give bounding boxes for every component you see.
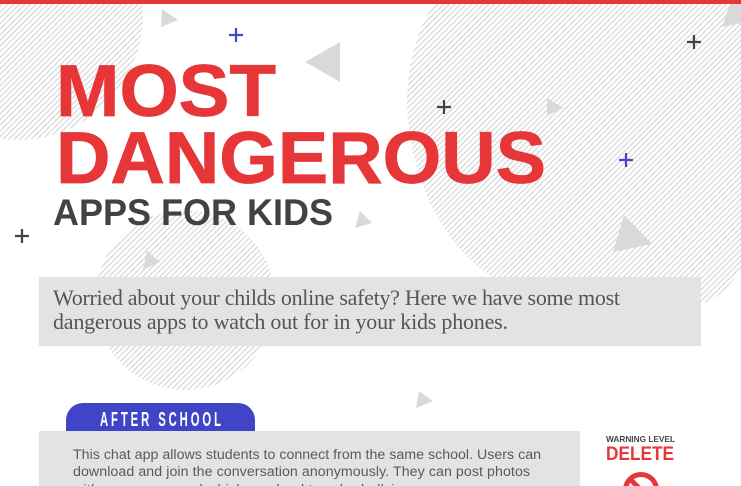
- hatched blob: right: [407, 0, 741, 311]
- description text: download and join the conversation anonymously. They can post photos: [73, 464, 530, 480]
- title: [56, 51, 546, 199]
- tab label: AFTER SCHOOL: [100, 407, 221, 431]
- intro text: dangerous apps to watch out for in your kids phones.: [53, 309, 508, 334]
- warning value: DELETE: [606, 443, 674, 465]
- icon: prohibited sign: [626, 474, 656, 486]
- warning level: WARNING LEVEL: [606, 435, 675, 444]
- intro panel: [39, 277, 701, 346]
- description text: This chat app allows students to connect from the same school. Users can: [73, 447, 541, 463]
- subtitle: APPS FOR KIDS: [53, 192, 333, 233]
- warning level: [606, 435, 675, 465]
- hatched circle: lower left: [95, 210, 275, 390]
- intro text: Worried about your childs online safety? Here we have some most: [53, 285, 620, 310]
- app description panel: [39, 431, 580, 486]
- app tab: After School: [66, 403, 255, 431]
- top red bar: [0, 0, 741, 4]
- title: DANGEROUS: [56, 118, 546, 199]
- title: MOST: [56, 51, 276, 132]
- plus markers: [15, 28, 701, 243]
- decorative triangles: [143, 4, 741, 408]
- hatched circle: top left: [0, 0, 143, 140]
